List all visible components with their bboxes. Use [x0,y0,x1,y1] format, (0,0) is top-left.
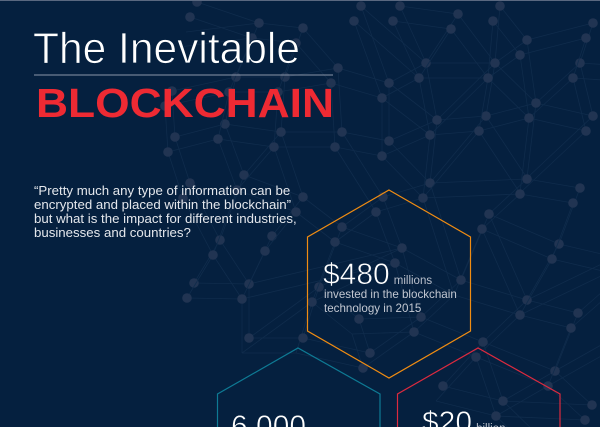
intro quote text block: “Pretty much any type of information can be [34,183,290,198]
intro quote text block: but what is the impact for different industries, [34,211,297,226]
hexagon panel: $20 billion [398,348,560,427]
stat description: invested in the blockchain [324,288,457,301]
intro quote text block: businesses and countries? [34,225,191,240]
stat: $480 millions: $480 millions [323,258,432,291]
stat description: technology in 2015 [324,302,421,315]
heading: BLOCKCHAIN: BLOCKCHAIN [36,80,334,126]
intro quote text block: encrypted and placed within the blockchain” [34,197,291,212]
background: blockchain network pattern [160,0,600,427]
hexagon panel: $480 millions invested [308,190,470,378]
title: The Inevitable: The Inevitable [33,24,300,73]
hexagon panel: 6,000 [218,348,380,427]
